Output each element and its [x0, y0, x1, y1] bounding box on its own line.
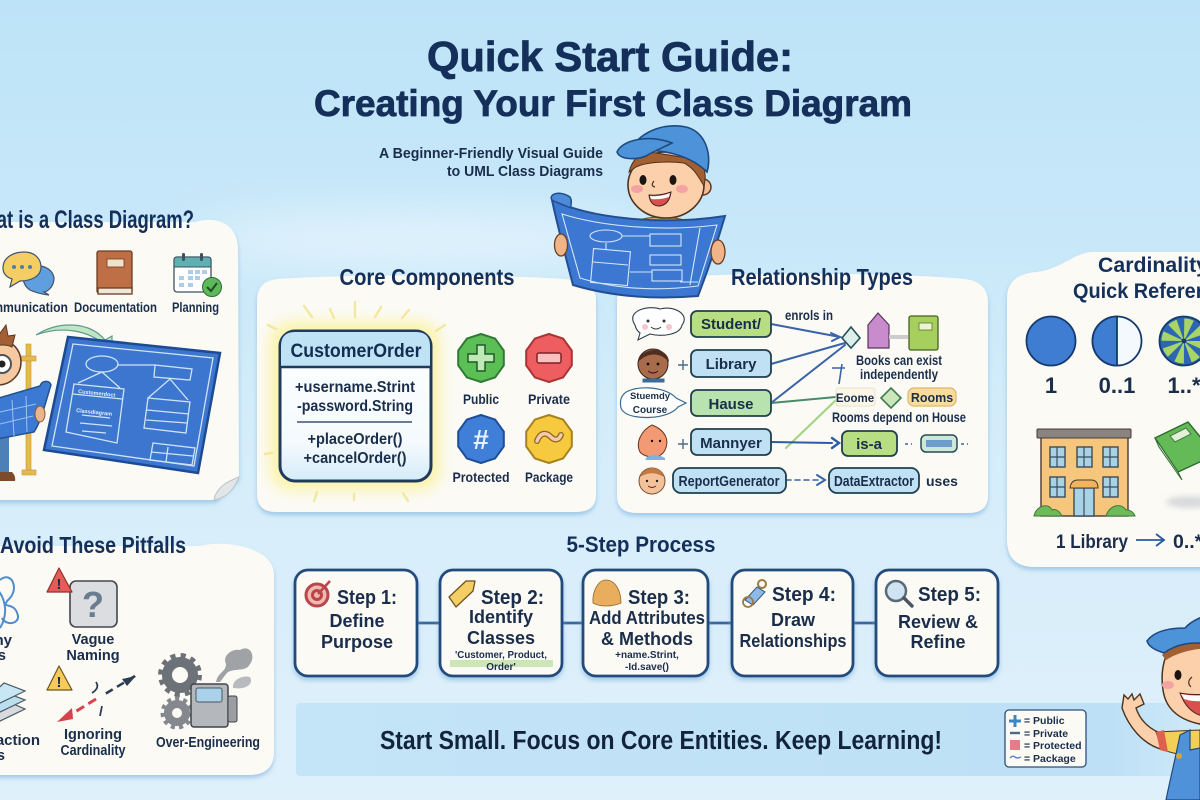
step 1: Step 1: [337, 586, 397, 609]
label: uses: uses [926, 473, 958, 489]
icon: vague naming [47, 568, 117, 627]
icon: magnifier [886, 581, 912, 606]
small box with dashes [905, 435, 968, 452]
subtitle: A Beginner-Friendly Visual Guide [379, 145, 603, 162]
badge: public: Public [463, 391, 499, 407]
label: enrols in: enrols in [785, 307, 833, 323]
step 1: Purpose [321, 632, 393, 652]
step 2 [440, 570, 562, 676]
box: ReportGenerator [673, 468, 786, 493]
label: vague naming: Vague [72, 632, 114, 648]
icon: character head [593, 580, 621, 606]
heading: 5-step process: 5-Step Process [566, 532, 716, 557]
step 5: Review & [898, 612, 978, 632]
panel: pitfalls [0, 532, 274, 775]
icon: library building [1034, 429, 1135, 516]
arrow: to blueprint [36, 325, 112, 352]
box: ReportGenerator: ReportGenerator [678, 474, 780, 490]
step 3 [583, 570, 708, 676]
bubble: student course [620, 388, 686, 417]
badge: protected: Protected [452, 469, 510, 485]
box: Manager: Mannyer [700, 435, 762, 452]
label: ignoring cardinality: Ignoring [64, 727, 122, 743]
small plus mark [832, 364, 845, 384]
composition row: Eoome [836, 393, 874, 405]
box: DataExtractor [829, 468, 919, 493]
cardinality: 1 [1026, 316, 1076, 398]
legend [1005, 710, 1086, 767]
badge: public [458, 334, 504, 407]
step 3: Step 3: [628, 586, 690, 609]
warning: cardinality: ! [56, 674, 62, 691]
step 4 [732, 570, 853, 676]
badge: private: Private [528, 391, 570, 407]
diamond: aggregation [842, 327, 860, 348]
hands [554, 234, 568, 256]
shirt and overalls [1156, 730, 1200, 760]
heading: relationship types: Relationship Types [731, 264, 913, 290]
legend: = Public [1024, 715, 1065, 727]
blueprint sheet [552, 200, 725, 298]
label: too many classes [0, 632, 13, 664]
labels: class diagram uses: Planning [172, 300, 219, 315]
step 3: -Id.save() [625, 662, 669, 673]
icon: vague naming: ! [56, 576, 62, 593]
heading: cardinality quick reference [1073, 253, 1200, 303]
legend: = Protected [1024, 740, 1081, 752]
step 2: 'Customer, Product, [455, 650, 547, 661]
step 4: Relationships [740, 631, 846, 651]
subtitle [379, 145, 603, 180]
icon: target [306, 581, 330, 606]
blueprint diagram: Classdiagram [76, 408, 112, 418]
ruler [15, 344, 36, 475]
face [631, 175, 688, 206]
ear [695, 179, 711, 195]
hair [629, 152, 705, 186]
badge: protected [452, 415, 510, 485]
step 2: Identify [469, 607, 533, 627]
box: is-a: is-a [856, 436, 883, 453]
step 5 [876, 570, 998, 676]
step 1 [295, 570, 417, 676]
banner text: Start Small. Focus on Core Entities. Keep Learning! [380, 727, 942, 755]
rays [265, 302, 445, 501]
bubble: student course: Course [633, 405, 668, 416]
badge: package: Package [525, 469, 573, 485]
blueprint diagram: Customerdoct [78, 389, 116, 399]
step 3: Add Attributes [589, 608, 705, 628]
icon: broken arrow [57, 676, 136, 722]
label: abstraction levels [0, 732, 40, 764]
icon: calendar [174, 253, 222, 296]
box: House: Hause [708, 396, 754, 413]
heading: core components: Core Components [340, 264, 514, 290]
label: over-engineering: Over-Engineering [156, 734, 260, 751]
icon: gears and machine [161, 648, 252, 727]
label: books can exist [856, 352, 942, 382]
badge: private [526, 334, 572, 407]
icon: green book [1155, 422, 1200, 508]
cap [630, 126, 709, 172]
legend: = Package [1024, 753, 1076, 765]
title: Quick Start Guide: [427, 33, 793, 80]
cardinality: 1: 1 [1045, 373, 1057, 398]
composition row [836, 388, 956, 408]
warning: cardinality [47, 666, 72, 691]
class box: CustomerOrder: +placeOrder() [308, 431, 402, 448]
shirt [628, 217, 696, 230]
icon: tangle [0, 577, 18, 628]
subtitle: to UML Class Diagrams [447, 163, 603, 180]
cardinality: 1..* [1160, 316, 1200, 398]
labels: class diagram uses: Documentation [74, 300, 157, 315]
step 2: Classes [467, 628, 535, 648]
box: DataExtractor: DataExtractor [834, 474, 914, 490]
icon: vague naming: ? [82, 584, 104, 625]
panel: what is a class diagram [0, 206, 239, 500]
banner [296, 703, 1200, 776]
label: ignoring cardinality: Cardinality [60, 743, 126, 759]
badge: protected: # [473, 424, 489, 455]
icon: backpack and book [868, 313, 938, 350]
label: vague naming: Naming [66, 648, 120, 664]
label: library to books: 1 Library [1056, 531, 1128, 553]
avatar: boy [638, 349, 688, 381]
box: Student [691, 311, 771, 337]
character: engineer with plan [0, 325, 51, 481]
bubble: student course: Stuemdy [630, 391, 671, 402]
folded corner [214, 477, 239, 500]
label: books can exist: independently [860, 366, 938, 382]
step 3: & Methods [601, 629, 693, 649]
blueprint diagram [44, 337, 220, 473]
step 4: Step 4: [772, 583, 836, 606]
icon: tag [449, 581, 475, 607]
step 2: Order' [486, 662, 516, 673]
icon: link [743, 580, 766, 607]
avatar: cloud face [633, 308, 684, 340]
class box: CustomerOrder [280, 331, 431, 481]
icon: book [97, 251, 132, 294]
labels: class diagram uses [0, 300, 219, 315]
step 5: Refine [910, 632, 966, 652]
class box: CustomerOrder: CustomerOrder [290, 341, 422, 362]
label: books can exist: Books can exist [856, 352, 942, 368]
head [1162, 645, 1200, 726]
panel: core components [257, 264, 596, 512]
title [314, 33, 912, 124]
class box: CustomerOrder: -password.String [297, 398, 413, 415]
box: Library: Library [706, 356, 757, 373]
box: Student: Student/ [701, 316, 762, 333]
connector arrows [771, 324, 845, 485]
legend: = Private [1024, 728, 1068, 740]
cardinality: 0..1: 0..1 [1099, 373, 1135, 398]
panel: cardinality [1007, 252, 1200, 567]
class box: CustomerOrder: +cancelOrder() [304, 450, 406, 467]
cardinality: 0..1 [1092, 316, 1142, 398]
panel: relationship types [617, 264, 988, 513]
step 3: +name.Strint, [615, 650, 679, 661]
step 1: Define [329, 611, 385, 631]
class box: CustomerOrder: +username.Strint [295, 379, 416, 396]
cardinality: 1..*: 1..* [1167, 373, 1200, 398]
label: ignoring cardinality [60, 727, 126, 759]
character: waving corner [1122, 614, 1200, 800]
box: is-a [842, 431, 897, 456]
box: Manager [691, 429, 771, 455]
step 2: Step 2: [481, 586, 544, 609]
glow [270, 322, 440, 490]
heading: avoid pitfalls: Avoid These Pitfalls [0, 532, 186, 558]
connectors [417, 622, 876, 624]
face [1162, 670, 1200, 717]
box: Library [691, 350, 771, 377]
icon: layers [0, 683, 25, 722]
box: House [691, 390, 771, 416]
head [628, 152, 704, 218]
label: library to books [1056, 531, 1200, 553]
title: Creating Your First Class Diagram [314, 83, 912, 124]
arm [1122, 694, 1164, 750]
avatar: orange face [638, 425, 688, 460]
composition row: Rooms [911, 391, 953, 405]
badge: package [525, 415, 573, 485]
cap [1147, 614, 1200, 653]
label: rooms depend on house: Rooms depend on House [832, 409, 966, 425]
avatar: smiling child [639, 468, 665, 494]
icon: chat bubbles [3, 252, 54, 295]
step 4: Draw [771, 610, 816, 630]
character: main holding blueprint [551, 126, 725, 298]
step 5: Step 5: [918, 583, 981, 606]
label: vague naming [66, 632, 120, 664]
